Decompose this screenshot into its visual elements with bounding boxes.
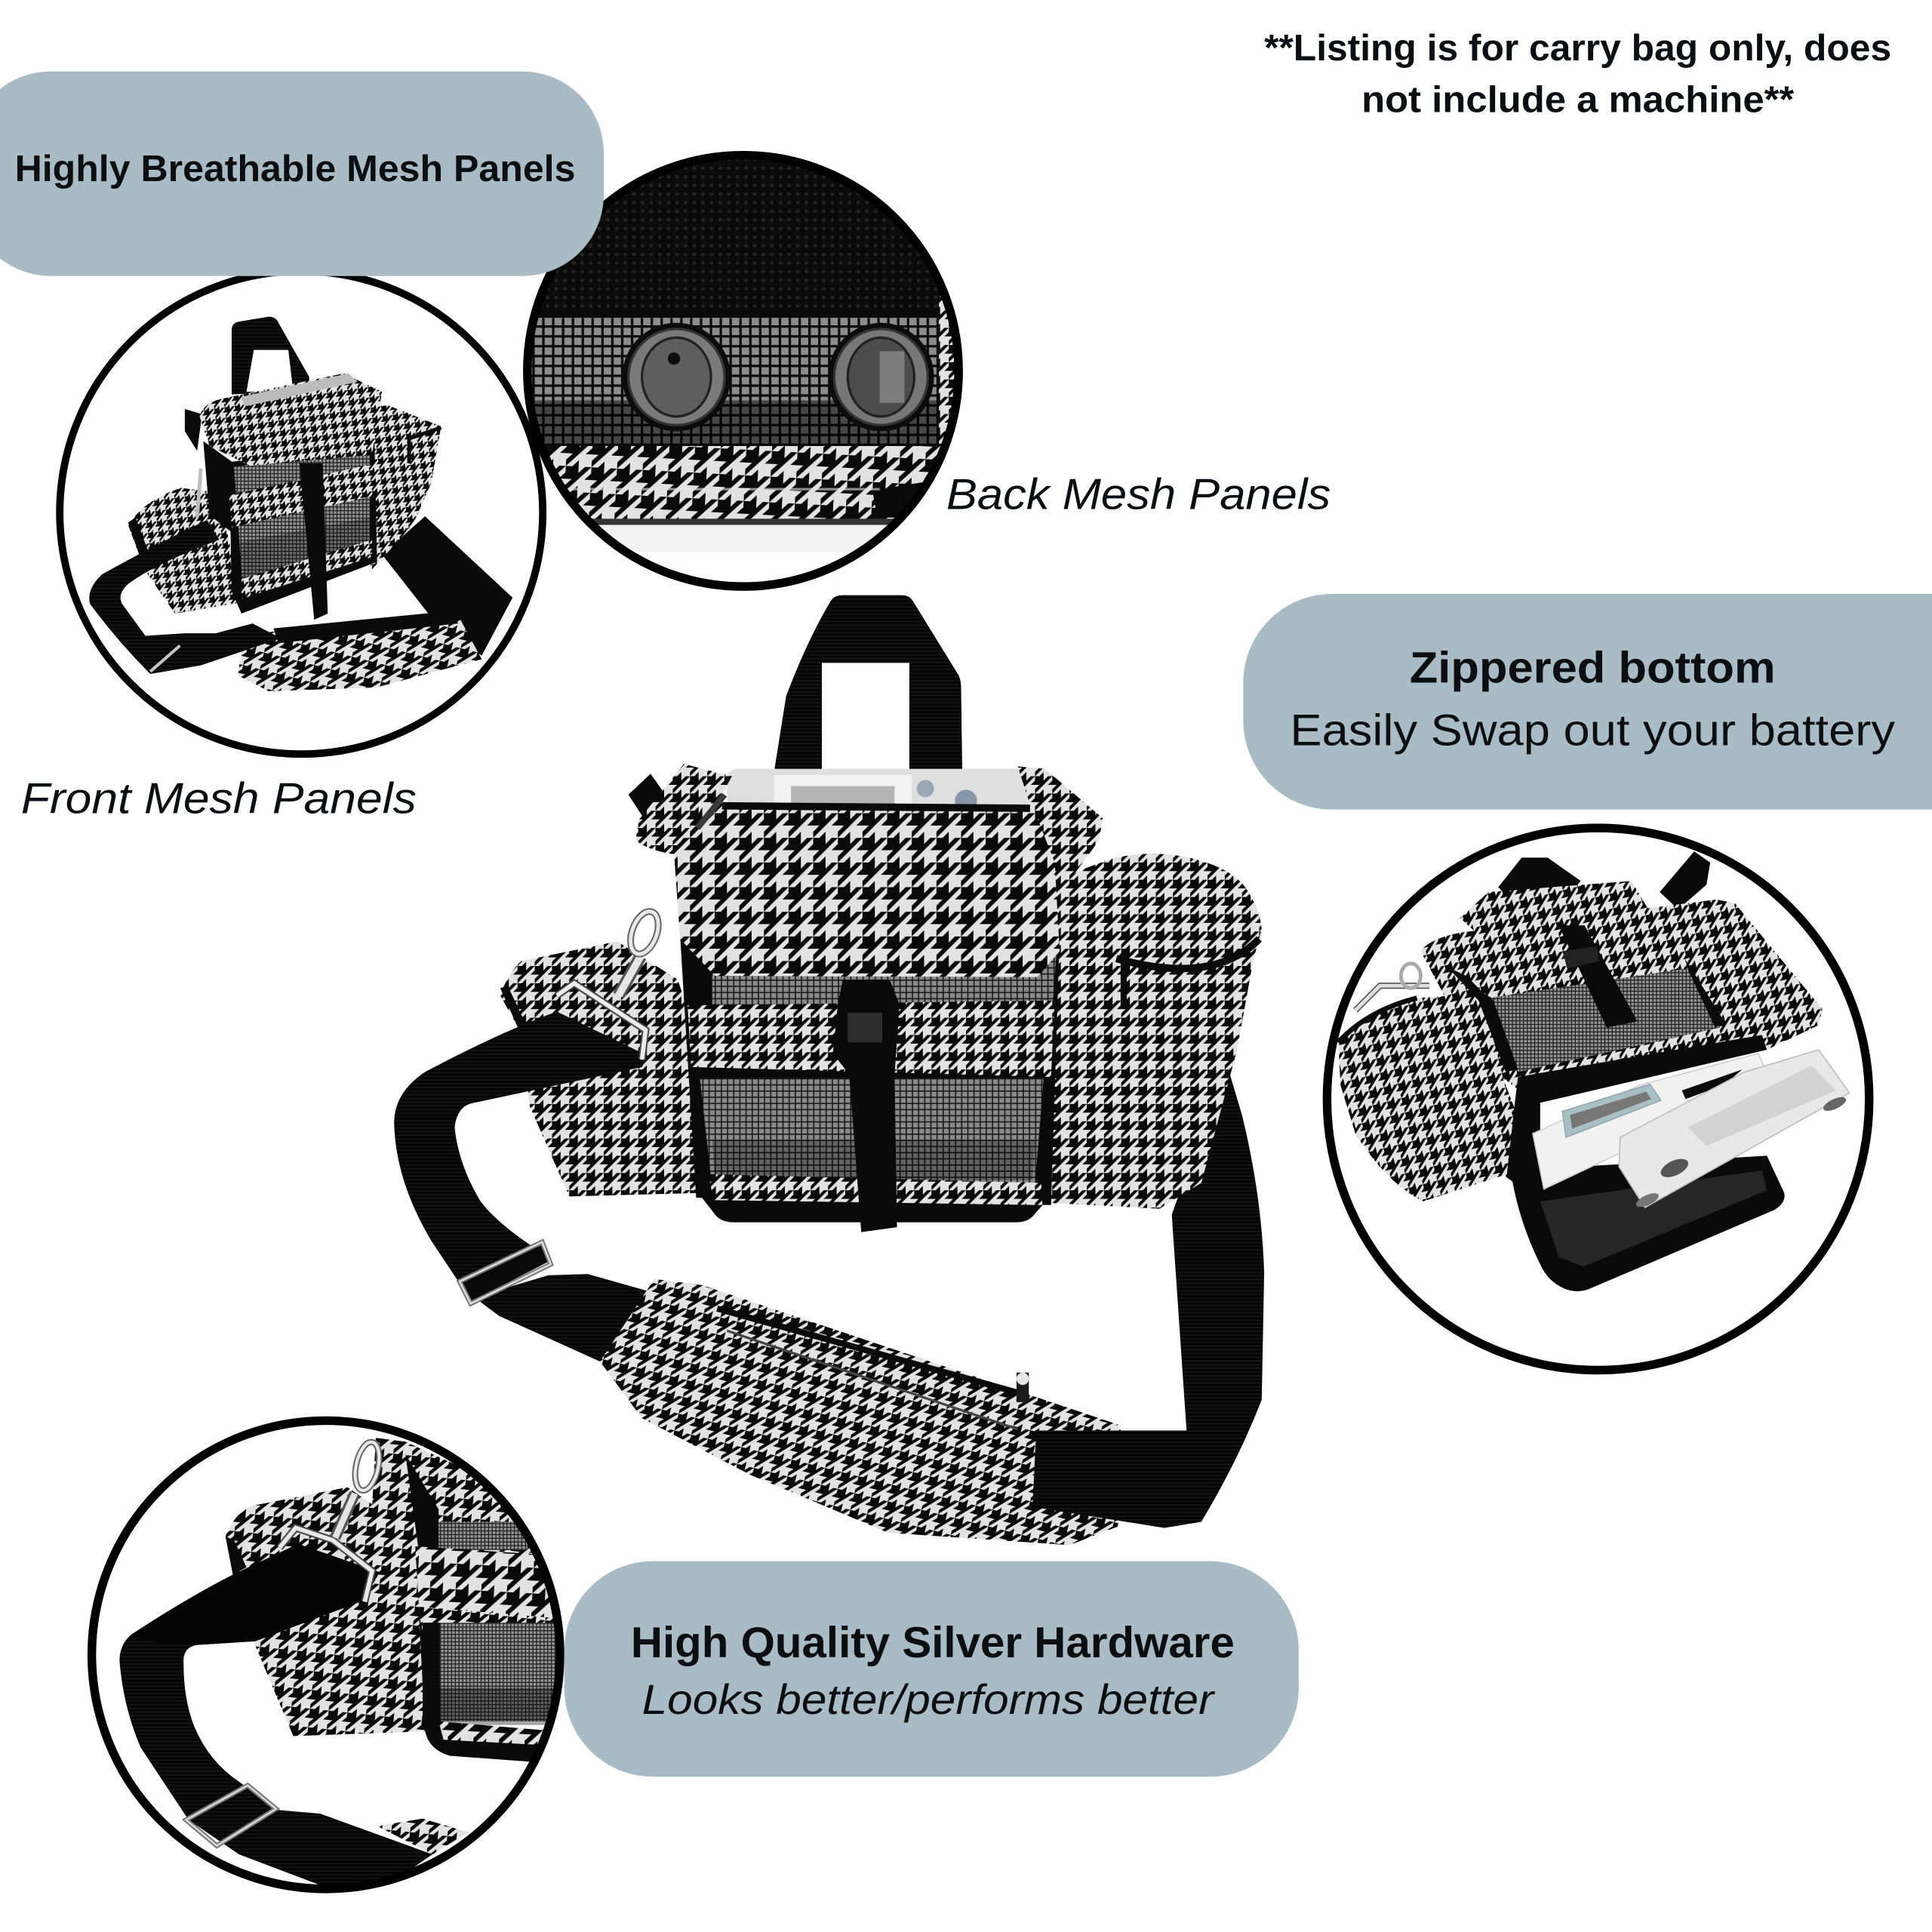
base edge <box>696 1190 1044 1223</box>
inset: front mesh panels photo <box>60 271 543 754</box>
carabiner hook <box>557 908 663 1060</box>
shoulder strap: left loop <box>394 1011 648 1281</box>
shoulder strap: pad connector <box>475 1274 693 1371</box>
inset: zippered bottom photo <box>1327 828 1869 1371</box>
top machine visible in bag <box>727 769 1030 812</box>
strap tab behind bag <box>629 774 672 823</box>
bottom houndstooth band <box>709 1174 1042 1205</box>
inset: silver hardware photo <box>92 1420 567 1897</box>
note: listing disclaimer <box>1264 28 1891 121</box>
lower mesh shadow <box>712 1140 1035 1180</box>
upper mesh panel <box>712 943 1057 1011</box>
pill: zippered bottom <box>1243 594 1932 810</box>
shoulder pad <box>600 1279 1134 1545</box>
pill: mesh panels heading: Highly Breathable Mesh Panels <box>15 149 575 189</box>
right side pocket <box>1042 854 1262 1209</box>
pill: silver hardware <box>565 1561 1299 1777</box>
middle houndstooth band <box>688 1001 1055 1077</box>
pill: mesh panels heading <box>0 72 604 276</box>
center body backing <box>680 937 1060 1205</box>
buckle and vertical strap <box>833 980 900 1232</box>
note: listing disclaimer: **Listing is for carry bag only, does <box>1264 28 1891 69</box>
inset: back mesh panels photo <box>522 148 966 586</box>
front flap <box>674 803 1060 977</box>
top handle <box>774 595 962 774</box>
shoulder strap: pad junction <box>1032 1431 1232 1527</box>
lower mesh panel <box>700 1078 1044 1184</box>
pill: zippered bottom: Easily Swap out your battery <box>1290 706 1896 755</box>
caption: back mesh panels: Back Mesh Panels <box>946 470 1331 518</box>
pill: silver hardware: Looks better/performs better <box>642 1676 1216 1723</box>
adjuster slider <box>460 1242 551 1303</box>
shoulder strap: right side <box>1032 1069 1264 1527</box>
pill: zippered bottom: Zippered bottom <box>1410 643 1776 692</box>
main product: houndstooth carry bag <box>394 595 1264 1545</box>
left side pocket <box>500 941 709 1196</box>
caption: front mesh panels: Front Mesh Panels <box>21 775 417 823</box>
flap zipper <box>722 806 1030 808</box>
note: listing disclaimer: not include a machine** <box>1361 80 1795 121</box>
left and right rims <box>635 764 732 855</box>
pill: silver hardware: High Quality Silver Hardware <box>631 1619 1235 1667</box>
